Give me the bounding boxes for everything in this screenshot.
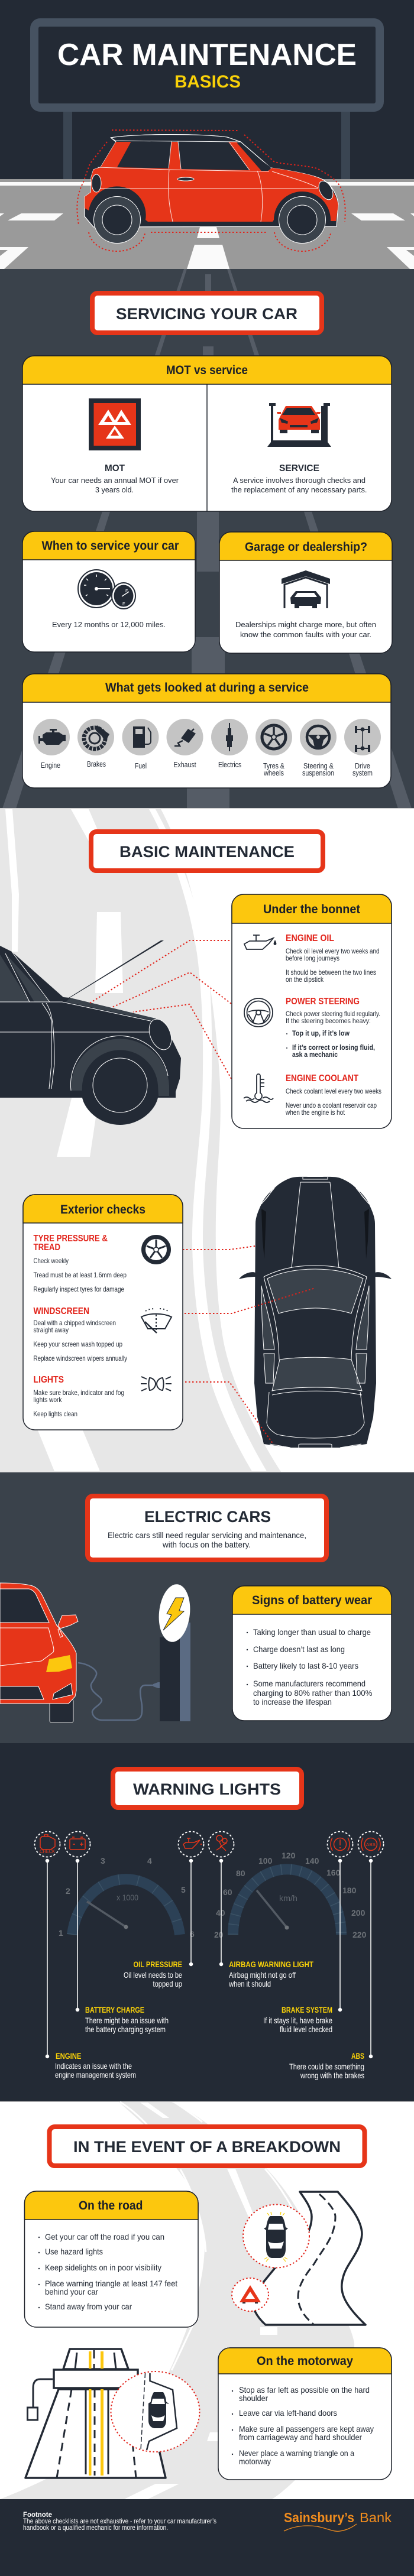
labels: service items: suspension	[302, 769, 334, 777]
icon: car on lift	[267, 403, 331, 447]
footnote: Footnote	[23, 2510, 52, 2519]
text: power steering: If it’s correct or losing fluid,	[292, 1043, 375, 1052]
illustration: car with open bonnet	[0, 940, 181, 1125]
text: brake system	[263, 2005, 332, 2034]
card: MOT vs service	[22, 356, 392, 511]
icon: gauges	[78, 570, 135, 609]
heading: warning lights: WARNING LIGHTS	[133, 1780, 281, 1798]
text: engine oil: on the dipstick	[286, 975, 324, 984]
card: garage or dealership: Garage or dealership?	[245, 540, 367, 554]
heading: electric cars: ELECTRIC CARS	[144, 1508, 271, 1526]
text: battery charge	[85, 2005, 169, 2034]
list: wear signs: Battery likely to last 8-10 years	[253, 1661, 358, 1670]
icon: exhaust	[167, 719, 203, 755]
list: wear signs: to increase the lifespan	[253, 1697, 332, 1706]
heading: breakdown	[50, 2127, 364, 2166]
icon: ABS light: ABS	[366, 1843, 376, 1847]
icon: wheel	[255, 719, 292, 755]
text: windscreen: straight away	[33, 1326, 69, 1334]
text: power steering: Check power steering fluid regularly.	[286, 1010, 380, 1018]
list: on the motorway: Make sure all passengers are kept away	[239, 2424, 374, 2434]
list: wear signs	[247, 1627, 373, 1706]
list: wear signs: Charge doesn’t last as long	[253, 1644, 345, 1654]
card: under the bonnet	[232, 894, 392, 1128]
heading: warning lights	[113, 1769, 302, 1808]
icon: steering wheel	[300, 719, 337, 755]
text: engine coolant: ENGINE COOLANT	[286, 1073, 358, 1083]
panel: electric cars	[0, 1472, 414, 1743]
footnote: handbook or a qualified mechanic for more information.	[23, 2523, 168, 2532]
icon: windscreen wiper	[141, 1309, 172, 1333]
text: windscreen: Replace windscreen wipers annually	[33, 1354, 127, 1362]
icon: engine	[33, 719, 70, 755]
text: service: A service involves thorough checks and	[233, 476, 366, 485]
card: garage or dealership: Dealerships might charge more, but often	[235, 620, 376, 629]
panel: basic maintenance	[0, 809, 414, 1472]
chart: speedometer gauge: 160	[326, 1868, 341, 1877]
icon: check engine light: CHECK	[40, 1849, 56, 1854]
list: wear signs: Taking longer than usual to charge	[253, 1627, 371, 1637]
text: oil pressure: Oil level needs to be	[124, 1970, 182, 1980]
text: ABS: There could be something	[289, 2062, 364, 2071]
text: service: SERVICE	[279, 463, 319, 473]
illustration: red hatchback	[77, 130, 345, 251]
card: what gets looked at during a service	[22, 674, 391, 788]
heading: servicing your car: SERVICING YOUR CAR	[116, 305, 297, 323]
chart: speedometer gauge: km/h	[279, 1893, 297, 1903]
chart: speedometer gauge: 200	[351, 1908, 366, 1918]
connector: under the bonnet	[90, 940, 231, 1079]
heading: electric cars: with focus on the battery.	[162, 1540, 251, 1549]
list: on the motorway: from carriageway and hard shoulder	[239, 2432, 362, 2442]
panel: in the event of a breakdown	[0, 2101, 414, 2499]
text: brake system: If it stays lit, have brake	[263, 2016, 332, 2025]
list: on the road: Stand away from your car	[45, 2302, 132, 2311]
card: on the road: On the road	[79, 2199, 143, 2212]
heading: breakdown: IN THE EVENT OF A BREAKDOWN	[73, 2138, 341, 2156]
icon: lights	[141, 1377, 172, 1391]
text: airbag warning light: AIRBAG WARNING LIGHT	[229, 1959, 313, 1969]
icon: gauges: E	[122, 602, 125, 606]
icon: tyre	[141, 1235, 171, 1264]
connector: exterior checks	[183, 1246, 315, 1444]
list: on the motorway: Never place a warning triangle on a	[239, 2448, 354, 2458]
illustration: car from above	[239, 1177, 392, 1448]
icon: oil can	[244, 935, 276, 949]
chart: speedometer gauge: 120	[282, 1851, 296, 1860]
chart: speedometer gauge: 60	[223, 1887, 232, 1897]
subtitle: BASICS	[174, 72, 241, 92]
text: power steering	[286, 997, 380, 1059]
labels: service items: Tyres &	[263, 762, 285, 770]
icon: fuel pump	[122, 719, 159, 755]
chart: rev counter gauge: 1	[59, 1928, 63, 1938]
text: brake system: fluid level checked	[280, 2025, 332, 2034]
labels: service items: Exhaust	[174, 761, 196, 769]
text: engine oil: Check oil level every two weeks and	[286, 947, 380, 955]
callout: hard shoulder stop	[111, 2371, 200, 2452]
heading: electric cars: Electric cars still need regular servicing and maintenance,	[108, 1530, 306, 1540]
icon: MOT sign	[89, 398, 141, 450]
illustration: charging point and cable	[78, 1583, 193, 1721]
text: battery charge: There might be an issue with	[85, 2016, 169, 2025]
heading: electric cars	[88, 1496, 326, 1560]
text: lights: Make sure brake, indicator and fog	[33, 1388, 124, 1397]
labels: service items: wheels	[263, 769, 284, 777]
text: engine oil	[286, 933, 380, 984]
chart: rev counter gauge	[59, 1856, 195, 1939]
road sign: title board	[34, 22, 380, 108]
text: tyre pressure: TREAD	[33, 1242, 60, 1253]
text: ABS: ABS	[351, 2051, 364, 2061]
card: on the road	[25, 2191, 198, 2327]
callout: hazard lights car	[243, 2205, 309, 2267]
icon: oil pressure light	[179, 1831, 203, 1857]
icon: steering wheel outline	[244, 998, 273, 1027]
card title: MOT vs service	[166, 364, 248, 377]
text: airbag warning light	[228, 1959, 313, 1988]
chart: speedometer gauge: 80	[236, 1868, 245, 1878]
title: CAR MAINTENANCE	[57, 38, 357, 72]
chart: speedometer gauge	[214, 1851, 367, 1939]
text: lights: lights work	[33, 1396, 62, 1404]
text: power steering: If the steering becomes heavy:	[286, 1017, 371, 1025]
text: service	[231, 463, 367, 494]
card: when to service: Every 12 months or 12,000 miles.	[52, 620, 166, 629]
text: tyre pressure: Check weekly	[33, 1257, 69, 1265]
labels: service items: Fuel	[135, 762, 147, 770]
text: windscreen	[33, 1306, 127, 1362]
text: oil pressure: topped up	[153, 1979, 182, 1988]
text: battery charge: BATTERY CHARGE	[85, 2005, 144, 2014]
text: MOT: MOT	[105, 463, 125, 473]
icon: ABS light	[358, 1831, 383, 1857]
card: when to service	[22, 531, 195, 652]
text: power steering: Top it up, if it’s low	[292, 1029, 350, 1037]
text: tyre pressure: Tread must be at least 1.6mm deep	[33, 1271, 127, 1279]
labels: service items: system	[352, 769, 373, 777]
list: wear signs: Some manufacturers recommend	[253, 1679, 366, 1688]
text: windscreen: WINDSCREEN	[33, 1306, 89, 1316]
text: lights: Keep lights clean	[33, 1410, 77, 1418]
callout: warning triangle	[232, 2278, 269, 2311]
heading: basic maintenance: BASIC MAINTENANCE	[119, 843, 295, 861]
labels: service items: Engine	[41, 761, 60, 770]
labels: service items: Brakes	[87, 760, 106, 768]
icon: spark plug	[211, 719, 248, 755]
connector lines	[46, 1860, 373, 2058]
text: airbag warning light: Airbag might not go off	[229, 1970, 296, 1980]
chart: rev counter gauge: 5	[181, 1885, 186, 1894]
icon: garage	[282, 570, 330, 608]
text: airbag warning light: when it should	[228, 1979, 271, 1988]
heading: servicing your car	[92, 293, 322, 333]
chart: speedometer gauge: 100	[258, 1856, 273, 1866]
text: engine oil: It should be between the two lines	[286, 968, 376, 976]
panel: footer	[0, 2499, 414, 2576]
list: on the motorway: shoulder	[239, 2393, 268, 2403]
chart: speedometer gauge: 40	[216, 1908, 225, 1918]
illustration: red electric car front	[0, 1583, 78, 1722]
text: service: the replacement of any necessary parts.	[231, 485, 367, 494]
list: on the motorway: motorway	[239, 2457, 271, 2466]
text: lights: LIGHTS	[33, 1375, 64, 1385]
text: tyre pressure	[33, 1234, 127, 1293]
list: on the road: Keep sidelights on in poor visibility	[45, 2263, 161, 2272]
text: tyre pressure: Regularly inspect tyres for damage	[33, 1285, 124, 1293]
card: garage or dealership: know the common faults with your car.	[240, 630, 371, 639]
text: engine oil: before long journeys	[286, 954, 339, 962]
icon: check engine light	[34, 1831, 60, 1857]
chart: rev counter gauge: 4	[147, 1856, 152, 1866]
chart: rev counter gauge: 6	[190, 1929, 195, 1939]
text: engine coolant: Never undo a coolant reservoir cap	[286, 1101, 377, 1109]
labels: service items: Steering &	[303, 762, 334, 770]
text: ABS	[289, 2051, 364, 2080]
panel: warning lights	[0, 1743, 414, 2101]
text: oil pressure	[124, 1959, 182, 1988]
card: signs of battery wear	[232, 1586, 392, 1721]
logo: Sainsbury's Bank: Sainsbury’s	[284, 2510, 354, 2525]
card: garage or dealership	[219, 532, 392, 653]
chart: speedometer gauge: 20	[214, 1930, 224, 1939]
chart: rev counter gauge: 2	[66, 1886, 70, 1896]
text: engine coolant: when the engine is hot	[285, 1108, 345, 1117]
list: on the road: Use hazard lights	[45, 2247, 103, 2256]
icon: drive system	[344, 719, 381, 755]
icon: brakes	[77, 719, 114, 755]
card: exterior checks	[23, 1195, 183, 1430]
text: engine: engine management system	[55, 2070, 136, 2079]
card: on the motorway	[218, 2348, 392, 2480]
card: when to service: When to service your car	[41, 539, 179, 553]
icon: brake light	[328, 1831, 352, 1857]
text: power steering: ask a mechanic	[292, 1050, 338, 1059]
labels: service items: Electrics	[218, 761, 241, 769]
text: oil pressure: OIL PRESSURE	[134, 1959, 182, 1969]
chart: speedometer gauge: 180	[342, 1886, 357, 1895]
footnote	[23, 2510, 216, 2532]
illustration: winding road with broken-down car	[232, 2192, 366, 2325]
text: engine: ENGINE	[56, 2051, 82, 2061]
text: tyre pressure: TYRE PRESSURE &	[33, 1234, 108, 1244]
chart: rev counter gauge: 3	[101, 1856, 105, 1866]
panel: servicing your car	[0, 269, 414, 809]
list: on the road: Place warning triangle at least 147 feet	[45, 2279, 177, 2288]
text: battery charge: the battery charging system	[85, 2025, 166, 2034]
text: engine coolant: Check coolant level every two weeks	[286, 1087, 381, 1095]
list: on the motorway: Stop as far left as possible on the hard	[239, 2385, 370, 2395]
list: on the road: behind your car	[45, 2287, 98, 2296]
card: under the bonnet: Under the bonnet	[263, 903, 360, 916]
icon: gauges: F	[125, 589, 128, 593]
text: windscreen: Deal with a chipped windscreen	[33, 1319, 116, 1327]
list: wear signs: charging to 80% rather than 100%	[253, 1688, 373, 1698]
text: MOT: 3 years old.	[95, 485, 134, 494]
list: on the road	[38, 2232, 177, 2311]
footnote: The above checklists are not exhaustive - refer to your car manufacturer’s	[23, 2517, 216, 2525]
text: brake system: BRAKE SYSTEM	[282, 2005, 332, 2014]
text: MOT: Your car needs an annual MOT if over	[51, 476, 179, 485]
heading: basic maintenance	[91, 832, 323, 871]
text: engine	[55, 2051, 136, 2079]
text: windscreen: Keep your screen wash topped up	[33, 1340, 122, 1348]
text: MOT	[51, 463, 179, 494]
text: power steering: POWER STEERING	[286, 997, 360, 1007]
labels: service items	[41, 760, 373, 777]
icon: airbag light	[208, 1831, 234, 1857]
panel: hero road scene	[0, 0, 414, 269]
text: lights	[33, 1375, 124, 1418]
chart: speedometer gauge: 220	[352, 1930, 367, 1939]
icon: battery light	[65, 1831, 90, 1857]
logo: Sainsbury's Bank	[284, 2510, 392, 2531]
icon: coolant thermometer	[244, 1074, 273, 1102]
labels: service items: Drive	[355, 762, 370, 770]
card: on the motorway: On the motorway	[257, 2354, 353, 2368]
chart: speedometer gauge: 140	[305, 1856, 319, 1866]
card: what gets looked at during a service: What gets looked at during a service	[105, 681, 309, 695]
list: on the motorway: Leave car via left-hand doors	[239, 2408, 337, 2418]
illustration: motorway with hard shoulder	[25, 2349, 200, 2478]
card: exterior checks: Exterior checks	[60, 1203, 145, 1216]
logo: Sainsbury's Bank: Bank	[360, 2510, 392, 2525]
text: ABS: wrong with the brakes	[300, 2071, 364, 2080]
text: engine oil: ENGINE OIL	[286, 933, 334, 943]
chart: rev counter gauge: x 1000	[117, 1893, 138, 1902]
text: engine coolant	[285, 1073, 381, 1117]
card: signs of battery wear: Signs of battery wear	[252, 1594, 372, 1607]
text: engine: Indicates an issue with the	[55, 2061, 132, 2071]
list: on the road: Get your car off the road if you can	[45, 2232, 164, 2241]
list: on the motorway	[232, 2385, 374, 2466]
